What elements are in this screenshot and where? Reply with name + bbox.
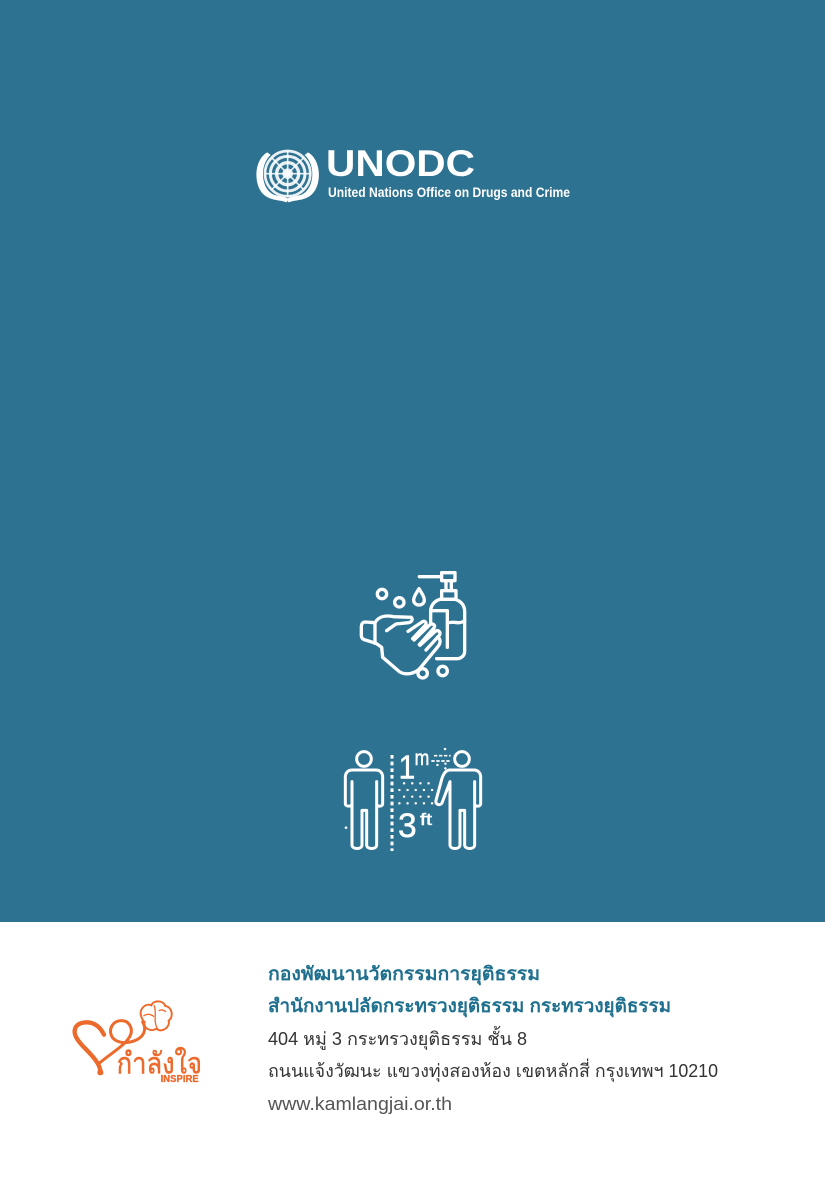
heading line 2: สำนักงานปลัดกระทรวงยุติธรรม กระทรวงยุติธรรม — [268, 995, 671, 1018]
icon: hand washing with soap — [361, 573, 465, 678]
wordmark: UNODC — [326, 143, 475, 184]
water drop — [414, 589, 424, 605]
dashed divider — [387, 755, 396, 851]
heart line — [75, 1022, 104, 1069]
label: 1m: m — [415, 746, 429, 770]
wordmark INSPIRE: INSPIRE — [161, 1074, 199, 1085]
panel: teal background — [0, 0, 825, 922]
icon: UN emblem — [256, 151, 319, 202]
wordmark Thai: กำลังใจ — [117, 1046, 202, 1080]
stray droplet — [345, 826, 347, 829]
icon: keep 1 metre / 3 feet distance — [345, 746, 481, 851]
text block: address — [267, 963, 718, 1114]
logo: Kamlangjai Inspire — [75, 1001, 202, 1085]
pump bottle — [419, 573, 465, 659]
person left — [345, 752, 383, 848]
tagline: United Nations Office on Drugs and Crime — [328, 185, 570, 200]
flower with face — [141, 1001, 172, 1030]
label: 3ft — [398, 807, 432, 845]
bubbles — [377, 589, 447, 678]
label: 1m: 1 — [399, 749, 415, 786]
label: 1m — [399, 746, 429, 786]
panel: white footer — [0, 922, 825, 1200]
hands — [361, 616, 440, 674]
label: 3ft: 3 — [398, 807, 417, 845]
label: 3ft: ft — [420, 810, 432, 829]
address line 1: 404 หมู่ 3 กระทรวงยุติธรรม ชั้น 8 — [268, 1026, 527, 1050]
address line 2: ถนนแจ้งวัฒนะ แขวงทุ่งสองห้อง เขตหลักสี่ กรุงเทพฯ 10210 — [268, 1058, 718, 1082]
logo: UNODC — [256, 143, 570, 202]
person right sneezing — [436, 752, 481, 848]
drop — [97, 1065, 103, 1075]
website: www.kamlangjai.or.th — [267, 1094, 452, 1114]
droplets — [399, 749, 449, 803]
heading line 1: กองพัฒนานวัตกรรมการยุติธรรม — [268, 963, 540, 986]
